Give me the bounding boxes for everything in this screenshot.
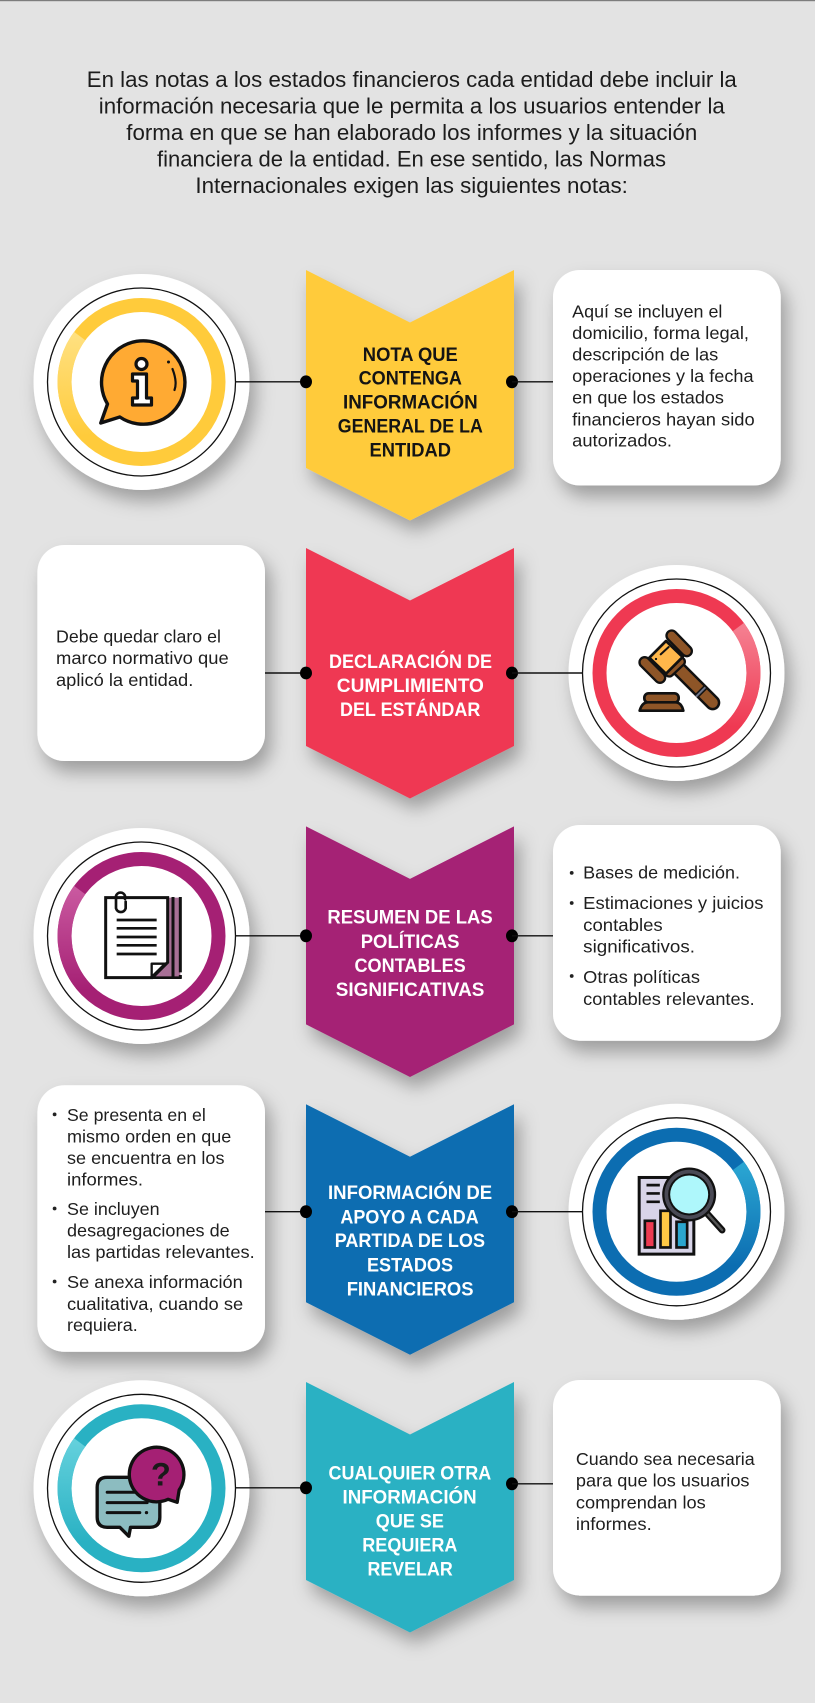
intro text: [87, 67, 737, 198]
chevron: nota 2: CUMPLIMIENTO: [337, 675, 484, 697]
chevron: nota 1: [306, 270, 514, 520]
card: nota 5 text: Cuando sea necesaria: [576, 1449, 755, 1469]
chevron: nota 3: CONTABLES: [354, 955, 466, 977]
card: nota 4 list: se encuentra en los: [67, 1148, 225, 1168]
chevron: nota 1: INFORMACIÓN: [343, 390, 478, 414]
chevron: nota 5: CUALQUIER OTRA: [328, 1462, 491, 1484]
card: nota 4 list: informes.: [67, 1170, 143, 1190]
chevron: nota 5: REQUIERA: [362, 1535, 457, 1557]
card: nota 5 text: [553, 1380, 781, 1596]
chevron: nota 5: [306, 1382, 514, 1632]
card: nota 4 list: cualitativa, cuando se: [67, 1294, 243, 1314]
chevron: nota 3: RESUMEN DE LAS: [327, 907, 493, 929]
chevron: nota 4: ESTADOS: [367, 1254, 453, 1276]
card: nota 3 list: contables relevantes.: [583, 989, 755, 1009]
connector: nota 4: [265, 1205, 583, 1218]
icon: documents with paperclip: [106, 893, 182, 978]
card: nota 3 list: [553, 825, 781, 1041]
icon: gavel: [640, 636, 713, 711]
card: nota 2 text: Debe quedar claro el: [56, 626, 221, 646]
intro text: información necesaria que le permita a los usuarios entender la: [99, 94, 725, 118]
card: nota 3 list: Bases de medición.: [583, 863, 740, 883]
card: nota 5 text: comprendan los: [576, 1492, 706, 1512]
card: nota 1 text: operaciones y la fecha: [572, 366, 754, 386]
card: nota 4 list: mismo orden en que: [67, 1127, 231, 1147]
chevron: nota 1: GENERAL DE LA: [338, 416, 483, 438]
icon: chat bubbles with question mark: ?: [151, 1456, 171, 1493]
chevron: nota 2: DECLARACIÓN DE: [329, 649, 492, 673]
card: nota 4 list: desagregaciones de: [67, 1221, 230, 1241]
intro text: En las notas a los estados financieros cada entidad debe incluir la: [87, 67, 737, 92]
intro text: financiera de la entidad. En ese sentido, las Normas: [157, 146, 666, 172]
card: nota 5 text: informes.: [576, 1514, 652, 1534]
card: nota 3 list: Estimaciones y juicios: [583, 893, 764, 913]
circle icon: report and magnifier: [568, 1104, 784, 1320]
card: nota 4 list: las partidas relevantes.: [67, 1242, 255, 1262]
card: nota 1 text: en que los estados: [572, 388, 724, 408]
card: nota 2 text: aplicó la entidad.: [56, 670, 193, 690]
chevron: nota 3: POLÍTICAS: [361, 930, 460, 953]
circle icon: gavel: [568, 565, 784, 781]
intro text: forma en que se han elaborado los informes y la situación: [126, 120, 697, 145]
card: nota 4 list: Se incluyen: [67, 1199, 160, 1219]
card: nota 2 text: [37, 545, 265, 761]
circle icon: information: [34, 274, 250, 490]
card: nota 2 text: marco normativo que: [56, 648, 229, 668]
card: nota 5 text: para que los usuarios: [576, 1471, 750, 1491]
chevron: nota 4: [306, 1104, 514, 1355]
chevron: nota 2: DEL ESTÁNDAR: [340, 698, 480, 721]
chevron: nota 5: INFORMACIÓN: [342, 1485, 477, 1509]
icon: chat bubbles with question mark: [97, 1447, 184, 1536]
card: nota 1 text: financieros hayan sido: [572, 409, 755, 429]
chevron: nota 4: INFORMACIÓN DE: [328, 1180, 492, 1204]
card: nota 3 list: significativos.: [583, 936, 695, 956]
chevron: nota 5: QUE SE: [376, 1510, 444, 1532]
card: nota 1 text: descripción de las: [572, 344, 719, 364]
chevron: nota 4: APOYO A CADA: [340, 1206, 479, 1228]
chevron: nota 1: NOTA QUE: [363, 344, 458, 366]
connector: nota 1: [235, 375, 553, 388]
card: nota 1 text: [553, 270, 781, 486]
chevron: nota 3: [306, 826, 514, 1077]
card: nota 4 list: [37, 1085, 265, 1352]
connector: nota 3: [235, 929, 553, 942]
connector: nota 2: [265, 667, 583, 679]
chevron: nota 4: PARTIDA DE LOS: [335, 1230, 485, 1252]
card: nota 3 list: Otras políticas: [583, 967, 700, 987]
card: nota 1 text: domicilio, forma legal,: [572, 323, 749, 343]
chevron: nota 5: REVELAR: [368, 1558, 453, 1580]
chevron: nota 1: ENTIDAD: [370, 440, 451, 462]
card: nota 4 list: Se presenta en el: [67, 1105, 206, 1125]
connector: nota 5: [235, 1477, 553, 1494]
card: nota 4 list: requiera.: [67, 1315, 138, 1335]
card: nota 3 list: contables: [583, 915, 663, 935]
card: nota 4 list: Se anexa información: [67, 1272, 243, 1292]
card: nota 1 text: autorizados.: [572, 431, 672, 451]
intro text: Internacionales exigen las siguientes notas:: [195, 173, 628, 198]
icon: info speech bubble: [101, 341, 185, 424]
chevron: nota 4: FINANCIEROS: [347, 1278, 474, 1300]
icon: report and magnifier: [639, 1167, 722, 1254]
card: nota 1 text: Aquí se incluyen el: [572, 302, 722, 322]
chevron: nota 3: SIGNIFICATIVAS: [336, 979, 484, 1001]
chevron: nota 2: [306, 548, 514, 798]
circle icon: documents: [34, 828, 250, 1044]
chevron: nota 1: CONTENGA: [359, 368, 462, 390]
circle icon: chat bubbles: [34, 1380, 250, 1596]
